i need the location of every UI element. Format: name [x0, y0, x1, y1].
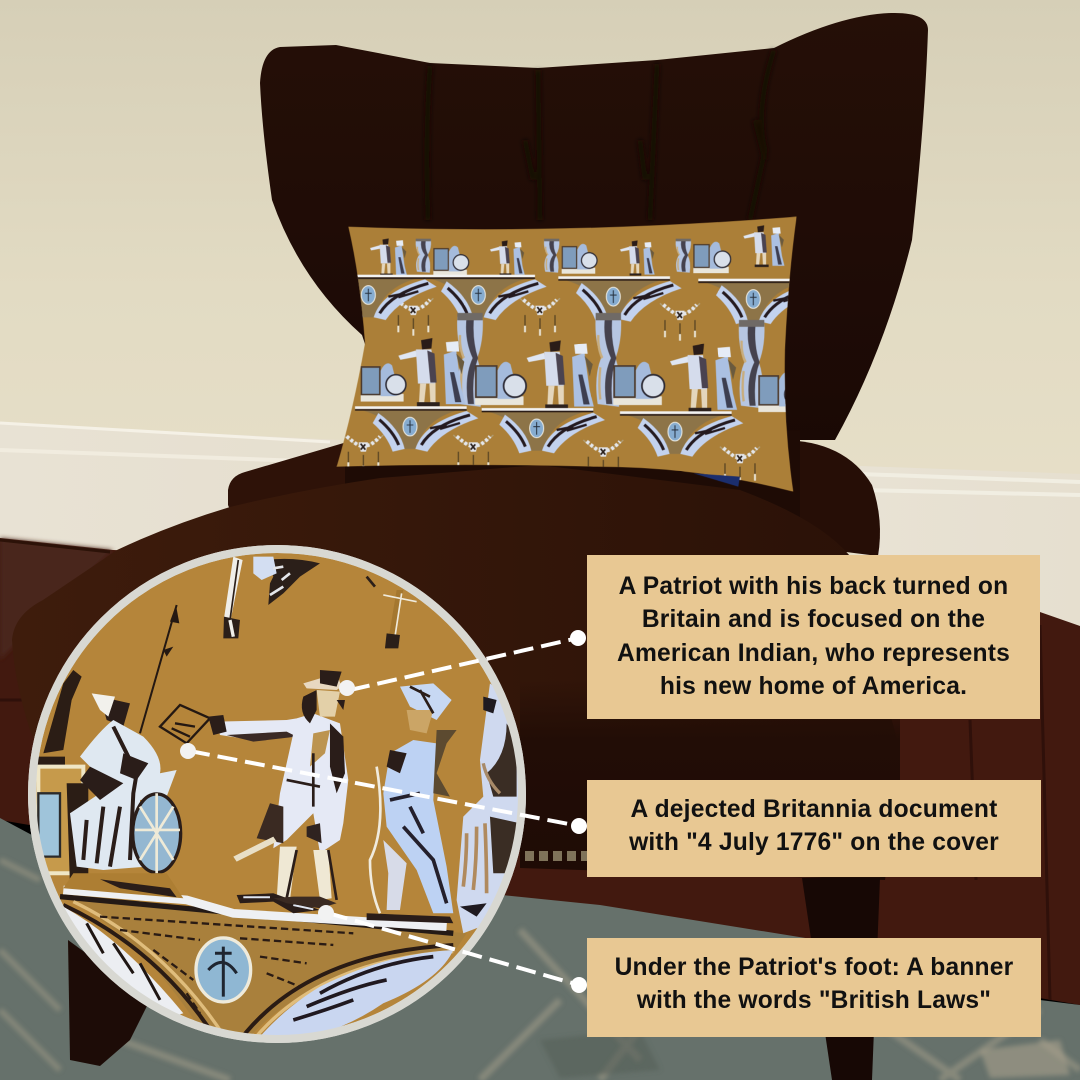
nail trim — [525, 851, 590, 861]
wall — [0, 0, 1080, 640]
swag top — [223, 557, 417, 648]
callout line: Britannia document — [180, 743, 587, 834]
pillow — [313, 217, 822, 492]
American Indian figure — [367, 683, 457, 923]
callout: British Laws — [587, 938, 1041, 1037]
white feather left — [63, 907, 183, 1020]
callout: Britannia document — [587, 780, 1041, 877]
seated Britannia — [37, 670, 183, 898]
callout: British Laws: with the words "British Laws" — [637, 987, 991, 1014]
baseboard left — [0, 423, 340, 560]
callout: patriot: his new home of America. — [660, 673, 967, 700]
chair arm right — [780, 440, 880, 556]
baseboard right — [860, 466, 1080, 626]
medallion — [196, 938, 251, 1002]
callout: patriot — [587, 555, 1040, 719]
callout line: patriot — [339, 630, 586, 696]
left floor boards — [0, 538, 113, 660]
magnified circle — [32, 549, 533, 1043]
lower arches — [355, 406, 743, 457]
document — [160, 705, 210, 743]
chair arm left — [228, 442, 370, 515]
upper arches — [357, 274, 790, 324]
top figure row — [370, 225, 784, 276]
callout: Britannia document: with "4 July 1776" on the cover — [629, 829, 999, 856]
twisted column right — [456, 684, 518, 934]
rug pattern — [0, 860, 1080, 1080]
garlands lower — [343, 435, 760, 484]
callout: Britannia document: A dejected Britannia document — [630, 796, 998, 823]
rug — [0, 818, 1080, 1080]
callout: British Laws: Under the Patriot's foot: A banner — [615, 954, 1013, 981]
middle figure row — [361, 338, 805, 412]
lower arch stonework — [60, 890, 467, 1040]
callout line: British Laws banner — [318, 905, 587, 993]
wood floor — [0, 538, 1080, 1005]
chair tufting — [427, 50, 774, 220]
twisted columns — [457, 313, 765, 408]
chair seat — [12, 465, 900, 800]
chair legs — [68, 940, 150, 1066]
callout: patriot: Britain and is focused on the — [642, 606, 985, 633]
seat skirt — [520, 680, 900, 880]
chair back — [260, 13, 928, 450]
spear — [140, 605, 179, 733]
shadow behind pillow — [345, 430, 800, 530]
white feather right — [262, 950, 453, 1035]
callout: patriot: A Patriot with his back turned on — [619, 573, 1008, 600]
callout: patriot: American Indian, who represents — [617, 640, 1010, 667]
garlands upper — [393, 298, 700, 341]
Patriot figure — [208, 670, 348, 913]
